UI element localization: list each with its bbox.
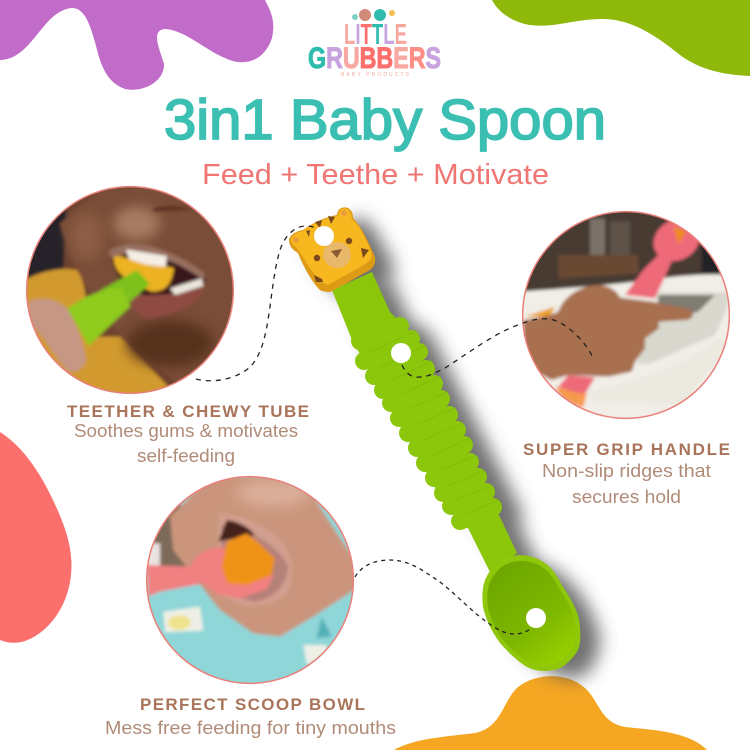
- text: scoop description: Mess free feeding for tiny mouths: [105, 718, 396, 738]
- blob: green top right: [492, 0, 750, 76]
- photo: child's hand gripping pink spoon: [522, 210, 730, 420]
- blob: orange bottom: [394, 676, 707, 750]
- text: grip description: [542, 461, 711, 507]
- heading: grip: SUPER GRIP HANDLE: [523, 440, 730, 459]
- photo: spoon feeding puree: [146, 476, 354, 684]
- marker dot: bowl: [526, 608, 546, 628]
- logo mascots: [352, 9, 395, 21]
- text: teether description: [74, 421, 298, 466]
- dashed connector: teether: [196, 226, 322, 381]
- marker dot: teether: [314, 226, 334, 246]
- spoon bowl hollow: [487, 561, 575, 665]
- blob: coral left: [0, 432, 71, 643]
- logo tagline: BABY PRODUCTS: [341, 72, 410, 78]
- text: grip description: Non-slip ridges that: [542, 461, 711, 481]
- text: teether description: self-feeding: [137, 446, 235, 466]
- rib shading: [370, 331, 498, 514]
- spoon bowl: [482, 555, 580, 671]
- spoon: [289, 207, 580, 671]
- spoon neck and handle: [332, 272, 517, 572]
- dashed connector: bowl: [355, 560, 532, 634]
- heading: teether: TEETHER & CHEWY TUBE: [67, 402, 309, 421]
- spoon ribs: [360, 326, 493, 521]
- marker dot: grip: [391, 343, 411, 363]
- tiger head: [289, 207, 375, 292]
- spoon shadow: [309, 216, 600, 679]
- logo: [308, 9, 441, 78]
- dashed connector: grip: [402, 319, 593, 377]
- subtitle: Feed + Teethe + Motivate: [202, 159, 549, 191]
- photo: teether in child's mouth: [26, 186, 234, 394]
- title: 3in1 Baby Spoon: [164, 88, 606, 152]
- text: teether description: Soothes gums & motivates: [74, 421, 298, 441]
- heading: scoop: PERFECT SCOOP BOWL: [140, 695, 365, 714]
- blob: purple top left: [0, 0, 273, 90]
- text: grip description: secures hold: [572, 487, 681, 507]
- logo word: Grubbers: GRUBBERS: [308, 42, 441, 75]
- logo word: Little: LITTLE: [344, 19, 407, 51]
